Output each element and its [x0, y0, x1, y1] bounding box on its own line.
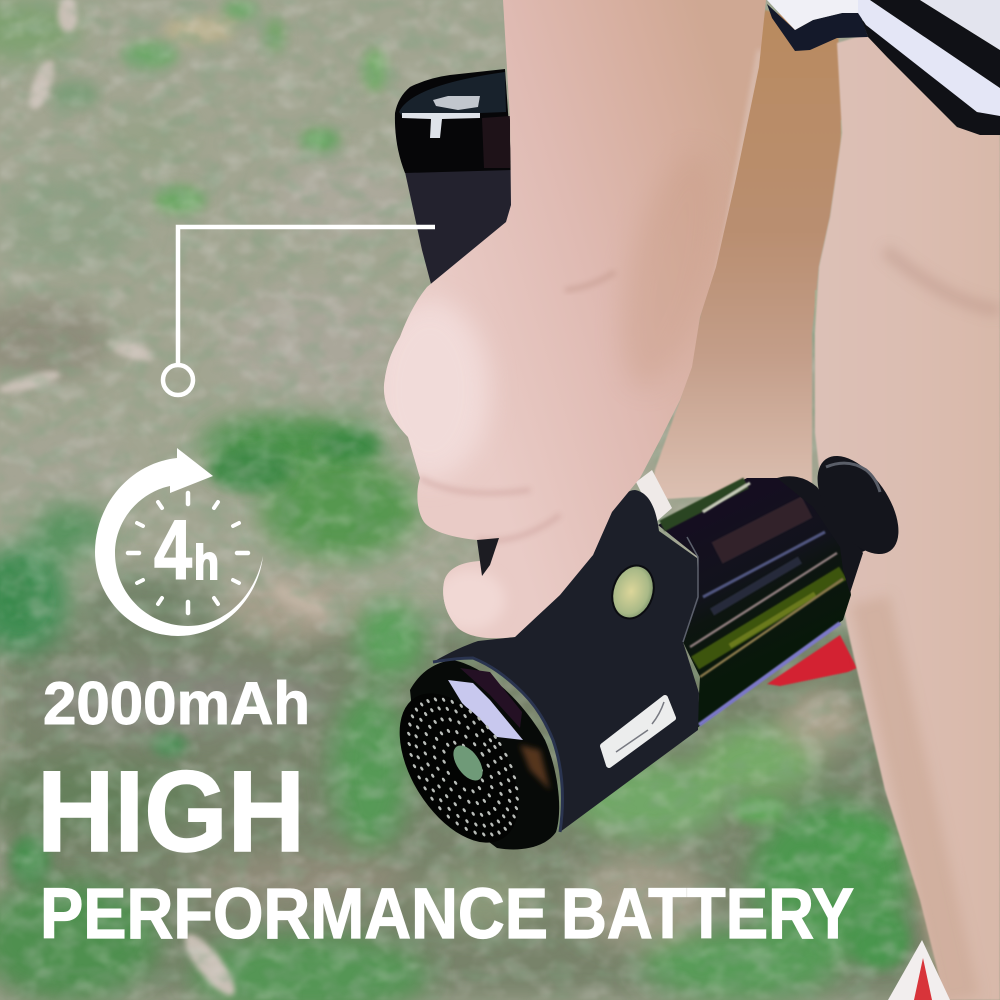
front leg — [815, 33, 1000, 1000]
clock ticks — [128, 493, 248, 613]
heading: PERFORMANCE BATTERY: BATTERY — [561, 875, 854, 954]
wrist crease — [565, 272, 615, 290]
rubber sleeve — [433, 490, 699, 832]
shorts waist trim — [767, 4, 868, 51]
gun barrel — [658, 478, 851, 728]
cap right shade — [482, 116, 510, 168]
cap top surface — [399, 72, 506, 116]
shorts upper black stripe — [870, 0, 1000, 88]
front glossy cap — [410, 660, 559, 849]
clock arrow — [95, 448, 263, 636]
callout line — [178, 227, 435, 366]
forearm tan shading — [622, 171, 707, 384]
perforated front face — [375, 673, 543, 863]
massage head — [801, 442, 915, 568]
upper massage gun handle — [395, 69, 512, 284]
red shoe — [767, 635, 857, 686]
capacity text: 2000mAh — [43, 670, 310, 737]
shorts — [767, 0, 1000, 135]
heading: PERFORMANCE BATTERY: PERFORMANCE — [40, 875, 548, 954]
sock and shoe bottom right — [888, 940, 950, 1000]
gap between the legs — [817, 120, 843, 400]
leg shading — [870, 250, 1000, 1000]
forearm pale streak — [718, 49, 760, 258]
cap highlights — [402, 96, 480, 138]
lower handle glimpse — [477, 538, 499, 576]
lower massage gun — [375, 442, 915, 863]
callout ring — [163, 365, 193, 395]
lower ground tone — [0, 620, 1000, 1000]
barrel seam — [683, 537, 698, 642]
logo label — [603, 698, 673, 765]
hand highlight — [370, 300, 490, 480]
cap brown reflection — [520, 745, 550, 790]
power button — [606, 560, 660, 624]
upper glossy cap — [395, 69, 512, 173]
barrel reflections — [662, 483, 843, 725]
sleeve rim — [433, 658, 562, 832]
knuckle highlight — [443, 572, 503, 632]
heading: PERFORMANCE BATTERY — [40, 875, 854, 954]
finger creases — [420, 478, 560, 541]
back leg — [650, 10, 843, 500]
upper grip — [405, 166, 512, 284]
shorts fabric corner — [920, 0, 1000, 50]
hand gripping the gun — [370, 0, 780, 650]
gun collar — [777, 476, 863, 593]
cap dark reflection — [460, 668, 522, 728]
heading: HIGH: HIGH — [37, 748, 305, 876]
icon: 4h clock — [95, 448, 263, 636]
shorts lower black stripe — [862, 20, 1000, 135]
clock label: h — [194, 537, 219, 590]
shorts white stripe — [858, 0, 1000, 116]
shorts white panel — [767, 0, 858, 30]
cap bright reflection — [448, 680, 523, 740]
white sock behind gun — [636, 470, 672, 522]
clock label: 4 — [154, 503, 192, 597]
